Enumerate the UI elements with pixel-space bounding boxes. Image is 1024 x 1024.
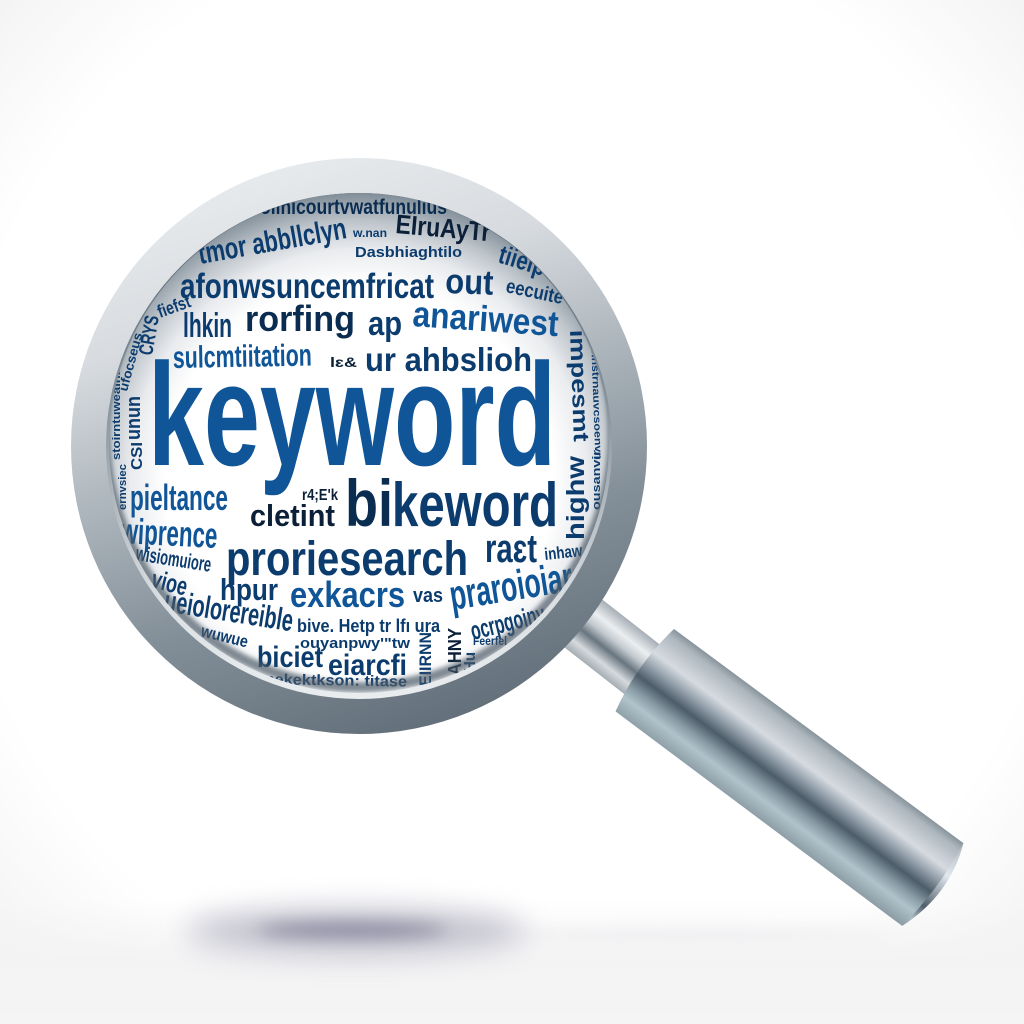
upper word cloud: out <box>445 262 494 303</box>
main word: keyword: keyword <box>148 333 556 496</box>
lower word cloud: EIIRNN <box>416 632 435 686</box>
lower word cloud: ueiolorereible <box>162 583 296 638</box>
right edge column text: impesmt <box>565 329 594 443</box>
magnifier ring <box>71 158 647 734</box>
secondary word: bikeword: keword <box>392 471 558 540</box>
upper word cloud: eecuite <box>504 275 565 309</box>
secondary word: bikeword: bi <box>345 466 393 540</box>
upper word cloud <box>155 196 565 378</box>
lower word cloud: hpur <box>220 572 278 607</box>
lens with word cloud <box>105 179 613 694</box>
lower word cloud: vioe <box>149 564 191 602</box>
lower word cloud: praroioiar <box>446 553 576 619</box>
upper word cloud: ur ahbslioh <box>365 341 532 378</box>
left edge column text: CRYS <box>135 314 164 357</box>
right edge column text <box>566 332 601 538</box>
upper word cloud: afonwsuncemfricat <box>180 267 434 306</box>
lower word cloud: ouyanpwy'"tw <box>300 635 410 652</box>
upper word cloud: w.nan <box>352 226 387 240</box>
lower word cloud: ocrpgoiny <box>467 598 549 646</box>
ground shadow <box>186 909 890 953</box>
left edge column text: ufocseus <box>115 331 145 393</box>
upper word cloud: lhkin <box>183 307 232 345</box>
floor band <box>0 900 1024 1024</box>
left edge column text: stoirntuwealnilo <box>111 360 123 460</box>
handle grip <box>609 627 971 932</box>
lower word cloud: pieltance <box>130 477 228 518</box>
inner lip <box>106 193 612 699</box>
lower word cloud <box>119 477 584 691</box>
upper word cloud: anariwest <box>411 293 560 344</box>
lower word cloud: r4;E'k <box>302 487 338 504</box>
lower word cloud: inhaw <box>543 541 584 564</box>
upper word cloud: ap <box>368 305 402 343</box>
lens glass <box>108 192 610 694</box>
upper word cloud: Dasbhiaghtilo <box>355 244 462 261</box>
lower word cloud: mekektkson: titase <box>260 671 407 691</box>
upper word cloud: sulcmtiitation <box>173 338 312 375</box>
lower word cloud: bive. Hetp tr lfı ura <box>297 616 441 636</box>
lower word cloud: biciet <box>257 641 323 674</box>
upper word cloud: tiieip <box>495 239 550 282</box>
right edge column text: ounnstrnauvcsoenvn <box>588 335 603 460</box>
handle assembly <box>547 586 971 932</box>
handle neck <box>547 586 675 705</box>
handle end cap <box>902 843 971 932</box>
lower word cloud: IAHNY <box>445 628 465 680</box>
lower word cloud: raɛt <box>485 527 537 571</box>
lower word cloud: exkacrs <box>290 574 405 615</box>
lower word cloud: vas <box>413 585 443 607</box>
lower word cloud: wuwue <box>198 621 250 651</box>
lower word cloud: wisiomuiore <box>134 542 213 577</box>
upper word cloud: EIruAyTr <box>394 209 492 247</box>
right edge column text: highw <box>562 455 590 540</box>
secondary word: bikeword <box>348 478 555 527</box>
upper word cloud: lɛ& <box>330 354 357 370</box>
left edge column text: ernvsiec <box>117 464 129 510</box>
left edge column text <box>112 316 158 510</box>
lower word cloud: wiprence <box>119 510 219 556</box>
word: proriesearch: proriesearch <box>226 533 468 586</box>
lower word cloud: cletint <box>250 498 335 533</box>
right edge column text: ousanvir <box>591 449 603 510</box>
lower word cloud: Hu <box>462 652 479 672</box>
left edge column text: CSI <box>129 442 146 470</box>
upper word cloud: tmor abbllclyn <box>195 212 349 271</box>
upper word cloud: fiefst <box>155 291 193 322</box>
upper word cloud: oilnicourtvwatfunulius <box>260 196 447 219</box>
lower word cloud: Feerfel <box>473 634 507 648</box>
lower word cloud: eiarcfi <box>328 649 407 682</box>
lens inner shadow <box>109 352 609 693</box>
upper word cloud: rorfing <box>245 298 355 339</box>
left edge column text: unun <box>123 396 145 440</box>
